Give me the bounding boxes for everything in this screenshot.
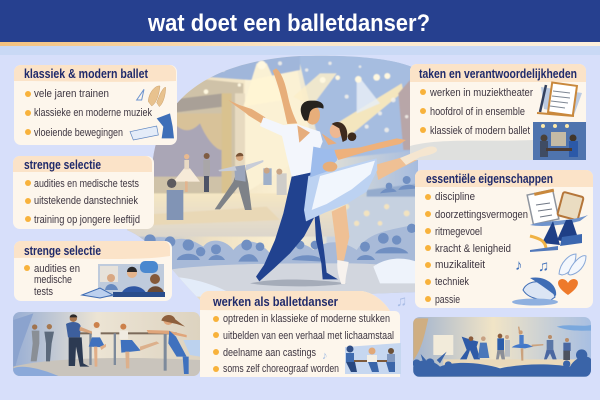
bullet list: vloeiende bewegingen (34, 127, 123, 139)
man: raised arm (273, 68, 297, 124)
blended lower band (410, 140, 533, 160)
icon: table meeting: ♪ (322, 350, 328, 362)
decorative music note: ♫ (396, 293, 407, 310)
man: shirt (260, 117, 323, 177)
icon: rehearsal scene (533, 122, 586, 160)
panel: klassiek & modern ballet: klassiek & modern ballet (24, 66, 149, 81)
audience (413, 349, 592, 377)
bullet list: klassieke en moderne muziek (34, 107, 152, 119)
audience silhouettes (144, 176, 415, 270)
icon: table meeting (322, 343, 401, 374)
bullet list: discipline (435, 191, 475, 203)
bullet list: muzikaliteit (435, 259, 485, 271)
bullet list: klassiek of modern ballet (430, 125, 530, 137)
panel: essentiële eigenschappen (415, 170, 593, 308)
barre training scene (13, 312, 200, 377)
bullet list: hoofdrol of in ensemble (430, 106, 525, 118)
bullet list: doorzettingsvermogen (435, 209, 528, 221)
bullet list: ritmegevoel (435, 226, 482, 238)
background dancers (167, 153, 287, 220)
panel: essentiële eigenschappen: essentiële eigenschappen (426, 171, 553, 186)
bullet list (425, 191, 528, 306)
bullet list (213, 313, 394, 375)
icon: music notes and slippers (515, 254, 586, 275)
woman: bodice and tutu (304, 158, 377, 221)
icon: script and pen (537, 82, 582, 116)
panel: taken en verantwoordelijkheden (410, 64, 586, 160)
bullet list: audities en medische tests (34, 178, 139, 190)
woman: pointe shoe (337, 260, 349, 284)
teacher and students (31, 314, 200, 374)
panel: strenge selectie: strenge selectie (24, 157, 101, 172)
bullet list: training op jongere leeftijd (34, 214, 140, 226)
woman: head and bun (330, 124, 341, 138)
icon: audition table (82, 261, 165, 298)
icon: metronomes (530, 220, 582, 252)
icon: heart (558, 279, 578, 295)
dancers on stage (460, 327, 571, 361)
bullet list: optreden in klassieke of moderne stukken (223, 313, 390, 325)
bullet list: passie (435, 294, 460, 306)
central illustration: ballet dancers on stage (113, 43, 421, 300)
woman: arm (333, 138, 406, 160)
barre (73, 332, 177, 371)
icon: music notes and slippers: ♪ (515, 257, 522, 274)
bullet list: kracht & lenigheid (435, 243, 511, 255)
panel: strenge selectie met audities (14, 241, 172, 301)
panel: klassiek & modern ballet (14, 65, 177, 145)
bullet list (420, 87, 533, 137)
theatre background (127, 56, 415, 248)
bullet text: tests (34, 286, 53, 298)
icon: ballet shoes (512, 277, 558, 306)
bullet list: werken in muziektheater (429, 87, 533, 99)
bullet list (25, 88, 152, 139)
bullet list: vele jaren trainen (34, 88, 109, 100)
stage performance scene (413, 317, 592, 377)
woman: raised leg (376, 157, 417, 180)
panel: strenge selectie (13, 156, 154, 229)
panel: werken als balletdanser: werken als balletdanser (212, 294, 338, 309)
bullet list: uitbelden van een verhaal met lichaamstaal (223, 330, 394, 342)
bullet list: deelname aan castings (223, 347, 316, 359)
bullet list: uitstekende danstechniek (34, 195, 138, 207)
man: trousers (256, 171, 338, 281)
bullet list: soms zelf choreograaf worden (223, 363, 339, 375)
panel: werken als balletdanser (200, 291, 401, 377)
bullet list (25, 178, 140, 226)
man: head (306, 108, 320, 125)
panel: strenge selectie met audities: strenge selectie (24, 243, 101, 258)
bullet list: techniek (435, 276, 469, 288)
bullet text: medische (34, 274, 72, 286)
icon: checklist and notebook (527, 189, 588, 226)
front stage edge (167, 259, 420, 297)
woman: standing leg (332, 205, 349, 261)
icon: music notes and slippers: ♫ (538, 258, 549, 275)
bullet text (24, 263, 80, 298)
man: extended arm (228, 100, 265, 125)
header banner (0, 0, 600, 46)
bullet text: audities en (34, 263, 80, 275)
man: supporting hand (323, 162, 337, 172)
icon: pointe shoes and costume (130, 86, 174, 140)
woman's pointe foot overlapping the panel (400, 146, 437, 165)
title: wat doet een balletdanser? (147, 10, 430, 37)
